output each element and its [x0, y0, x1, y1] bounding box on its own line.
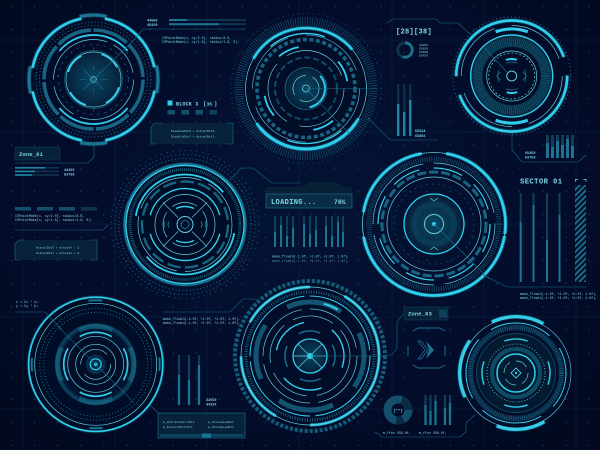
outer rim: [17, 3, 170, 156]
leader and data readout: top left: 44509: [147, 19, 158, 23]
zone 03 label: Zone_03: [408, 312, 432, 318]
dial: bottom centre: [216, 262, 404, 450]
dial: top centre: [222, 4, 390, 173]
zone 01 bars and numbers: [15, 167, 75, 178]
dial: top right: [451, 16, 572, 136]
zone 03 label: [386, 307, 448, 355]
status panel: [151, 123, 233, 144]
donut gauge: 53769: [419, 51, 428, 54]
leader and bars: top right: 59759: [525, 156, 536, 160]
coordinates and leader: bottom left: [15, 300, 62, 330]
donut gauge: 59759: [419, 54, 428, 58]
leader: dial to loading bar: [230, 168, 300, 183]
leader and timer readout: top right block: [28][38]: [396, 28, 432, 36]
dark donut gauge: [**]: [393, 408, 403, 414]
sector 01 heading: SECTOR 01: [520, 178, 563, 186]
status panel: DisableDitY + ActualDitY,: [171, 134, 216, 138]
sector 01 bars: make_float4(-1.0f, +1.0f, +1.0f, 1.0f),: [520, 296, 597, 300]
bars and captions: bottom right: m_ffov X58.0f,: [419, 431, 447, 435]
glowing inner band: [55, 323, 137, 405]
outer rim: [456, 20, 567, 132]
data panel: bottom left: m_ProvSpeedSlt: [208, 425, 234, 429]
loading bar panel: [266, 182, 352, 208]
bar cluster: loading: make_float4(-1.0f, +1.0f, +1.0f, 1.0f),: [272, 259, 349, 263]
donut gauge: 55659: [419, 48, 428, 50]
outer rim: [333, 123, 535, 325]
zone 01 bars and numbers: 53768: [64, 174, 75, 178]
dial: centre right: [333, 123, 535, 325]
make_float text and leader: make_float4(-1.0f, +1.0f, +1.0f, 1.0f),: [163, 321, 240, 325]
vertical bars: bottom left: 22659: [206, 399, 217, 403]
vertical bars: top centre right: 55856: [415, 135, 426, 139]
data panel: bottom left: m_KlsnoraPrctSlt: [163, 425, 193, 429]
zone 01 label: Zone_01: [19, 152, 43, 158]
block 3 indicator: [168, 100, 217, 114]
data panel: bottom left: [150, 405, 245, 438]
sector 01 bars: make_float4(-1.0f, +1.0f, +1.0f, 1.0f),: [520, 292, 597, 296]
dial: centre left: [111, 150, 259, 298]
left code notes: COPointMake(x, cy/1.8), radius/1.8, 0);: [15, 218, 92, 222]
coordinates and leader: bottom left: x = Cx * w;: [16, 300, 38, 305]
dial: top left: [17, 3, 170, 156]
status panel: DisableDitX + ActualDitX,: [171, 129, 216, 133]
bar cluster: loading: [272, 216, 349, 263]
block 3 indicator: [: [203, 101, 206, 107]
sector 01 bars: [483, 185, 597, 300]
leader and timer readout: top right block: [387, 19, 470, 36]
make_float text and leader: [163, 299, 257, 325]
bars and captions: bottom right: [375, 395, 475, 437]
block 3 indicator: BLOCK 3: [176, 101, 198, 107]
outer rim: [216, 262, 404, 450]
icon: double chevron: [408, 328, 445, 368]
alscale panel: ActualDitX + alscale - 1: [36, 246, 79, 250]
tick halo: [231, 14, 381, 164]
vertical bars: top centre right: 55544: [415, 130, 426, 134]
dark donut gauge: [385, 397, 411, 423]
zone 01 label: [15, 143, 94, 163]
left code notes: [15, 207, 108, 230]
dotted halo: [111, 150, 259, 298]
data panel: bottom left: m_UxtractHurrnSlt: [163, 420, 195, 424]
leader and data readout: top left: COPointMake(x, cy/1.8), radius/1.8, 0);: [162, 40, 239, 44]
outer rim: [439, 296, 593, 450]
leader and data readout: top left: 45929: [147, 24, 158, 28]
dial: bottom right: [439, 296, 593, 450]
leader and data readout: top left: COPointMake(x, cy/2.0), radius/8.0,: [162, 36, 231, 40]
block 3 indicator: ]: [214, 101, 217, 107]
leader and data readout: top left: [94, 19, 246, 79]
leader and bars: top right: 65459: [525, 152, 536, 156]
vertical bars: bottom left: 44236: [206, 404, 217, 408]
dial: bottom left: [25, 294, 166, 435]
data panel: bottom left: m_ProvidcoaSlt: [208, 420, 234, 424]
vertical bars: top centre right: [368, 84, 438, 140]
bars and captions: bottom right: m_ffov X58.0f,: [383, 431, 411, 435]
loading bar panel: LOADING...: [271, 199, 317, 207]
coordinates and leader: bottom left: y = Cy * h;: [16, 304, 38, 309]
alscale panel: [15, 240, 97, 260]
loading bar panel: 76%: [334, 199, 346, 206]
vertical bars: bottom left: [179, 355, 217, 408]
block 3 indicator: 35: [206, 101, 212, 107]
donut gauge: 44059: [419, 44, 428, 47]
bar cluster: loading: make_float4(-1.0f, +1.0f, +1.0f, 1.0f),: [272, 254, 349, 258]
sector 01 heading: [520, 178, 586, 186]
make_float text and leader: make_float4(-1.0f, +1.0f, +1.0f, 1.0f),: [163, 317, 240, 321]
zone 01 bars and numbers: 44459: [64, 169, 75, 173]
donut gauge: [398, 43, 428, 58]
alscale panel: ActualDitY + alscale + 0: [36, 251, 79, 255]
left code notes: COPointMake(x, cy/2.0), radius/8.0,: [15, 214, 84, 218]
leader and bars: top right: [512, 133, 586, 162]
